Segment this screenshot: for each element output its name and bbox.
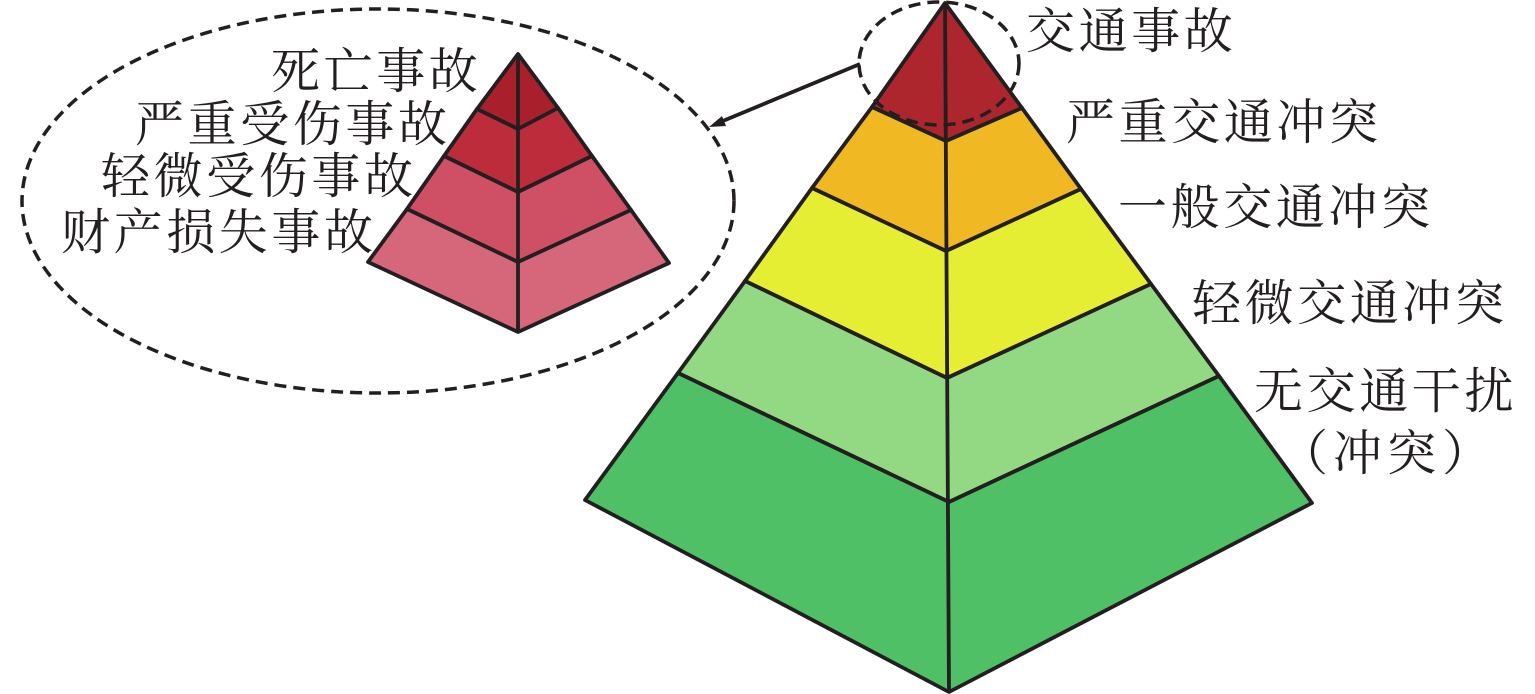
small pyramid — [368, 54, 669, 332]
main pyramid — [585, 3, 1312, 692]
tier: general traffic conflict — [745, 188, 1151, 378]
main pyramid labels: （冲突） — [1279, 426, 1491, 481]
centre edge — [945, 3, 949, 692]
main pyramid labels: 严重交通冲突 — [1066, 95, 1382, 150]
tier: minor traffic conflict — [678, 281, 1219, 502]
tier: serious injury accident — [444, 108, 592, 192]
dashed ellipse around pyramid top — [859, 2, 1019, 125]
tier: minor injury accident — [407, 156, 631, 262]
tier: serious traffic conflict — [812, 107, 1081, 251]
tier: property damage accident — [368, 209, 669, 332]
small pyramid labels: 严重受伤事故 — [135, 97, 451, 152]
main pyramid labels: 交通事故 — [1026, 4, 1236, 59]
main pyramid labels — [1026, 4, 1517, 481]
main pyramid labels: 无交通干扰 — [1254, 364, 1517, 419]
tier: fatal accident — [477, 54, 558, 129]
tier: no traffic interference — [585, 373, 1312, 692]
small centre edge — [516, 54, 520, 332]
arrow from top to detail — [709, 64, 860, 127]
small pyramid labels — [61, 44, 481, 260]
small pyramid labels: 轻微受伤事故 — [101, 149, 417, 204]
small pyramid labels: 死亡事故 — [271, 44, 481, 99]
main pyramid labels: 一般交通冲突 — [1118, 180, 1434, 235]
main pyramid labels: 轻微交通冲突 — [1192, 276, 1508, 331]
dashed ellipse around small pyramid — [22, 9, 734, 393]
small pyramid labels: 财产损失事故 — [61, 205, 377, 260]
tier: traffic accident — [872, 3, 1022, 141]
